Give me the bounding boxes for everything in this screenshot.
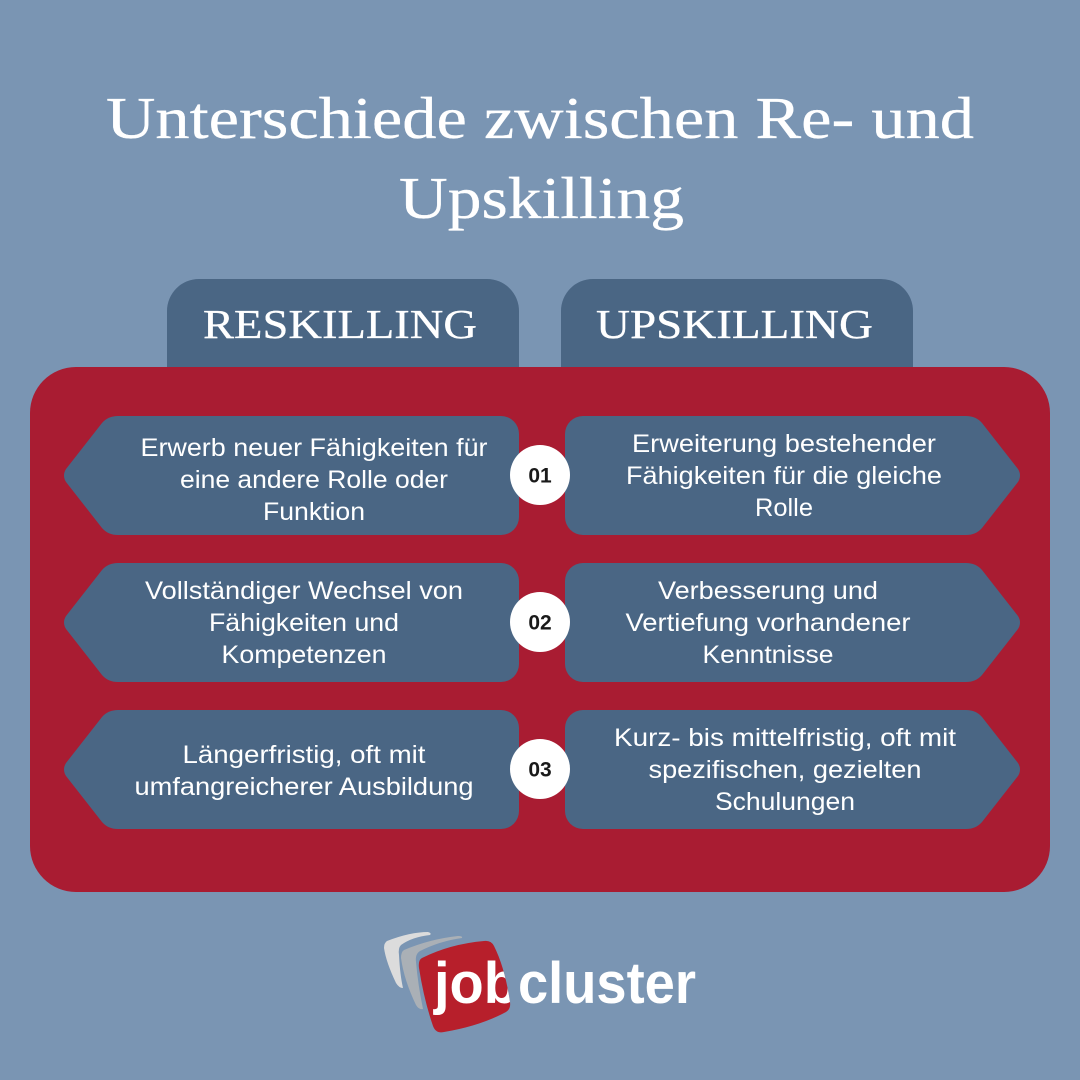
row 2 upskilling xyxy=(565,563,1020,682)
tab: upskilling: UPSKILLING xyxy=(596,301,873,347)
row 3 reskilling xyxy=(64,710,519,829)
row 2 upskilling: Verbesserung und xyxy=(658,577,878,605)
row 3 upskilling: Kurz- bis mittelfristig, oft mit xyxy=(614,724,956,752)
tab: upskilling xyxy=(561,279,913,367)
row 1 upskilling xyxy=(565,416,1020,535)
row 1 reskilling: Erwerb neuer Fähigkeiten für xyxy=(140,434,488,462)
badge 03 xyxy=(510,739,570,799)
title xyxy=(106,85,974,231)
logo: jobcluster: cluster xyxy=(518,951,696,1016)
badge 03: 03 xyxy=(528,758,552,782)
row 1 reskilling xyxy=(64,416,519,535)
badge 02 xyxy=(510,592,570,652)
title: Unterschiede zwischen Re- und xyxy=(106,85,974,151)
row 3 upskilling xyxy=(565,710,1020,829)
logo: jobcluster xyxy=(384,932,696,1032)
row 1 upskilling: Fähigkeiten für die gleiche xyxy=(626,462,942,490)
row 1 upskilling: Rolle xyxy=(755,494,813,522)
badge 01 xyxy=(510,445,570,505)
tab: reskilling xyxy=(167,279,519,367)
row 1 reskilling: eine andere Rolle oder xyxy=(180,466,448,494)
tab: reskilling: RESKILLING xyxy=(203,301,477,347)
logo: jobcluster: job xyxy=(433,951,518,1016)
row 1 reskilling: Funktion xyxy=(263,498,365,526)
row 1 upskilling: Erweiterung bestehender xyxy=(632,430,936,458)
badge 02: 02 xyxy=(528,612,552,634)
badge 01: 01 xyxy=(528,464,552,488)
row 2 reskilling: Kompetenzen xyxy=(222,641,386,669)
row 2 upskilling: Kenntnisse xyxy=(702,641,834,669)
row 2 reskilling xyxy=(64,563,519,682)
panel: comparison xyxy=(30,367,1050,892)
row 2 upskilling: Vertiefung vorhandener xyxy=(626,609,910,637)
row 3 upskilling: Schulungen xyxy=(715,788,855,816)
row 3 reskilling: umfangreicherer Ausbildung xyxy=(134,773,474,801)
row 3 reskilling: Längerfristig, oft mit xyxy=(182,741,426,769)
row 3 upskilling: spezifischen, gezielten xyxy=(648,756,922,784)
row 2 reskilling: Fähigkeiten und xyxy=(209,609,399,637)
title: Upskilling xyxy=(399,165,684,231)
row 2 reskilling: Vollständiger Wechsel von xyxy=(145,577,463,605)
